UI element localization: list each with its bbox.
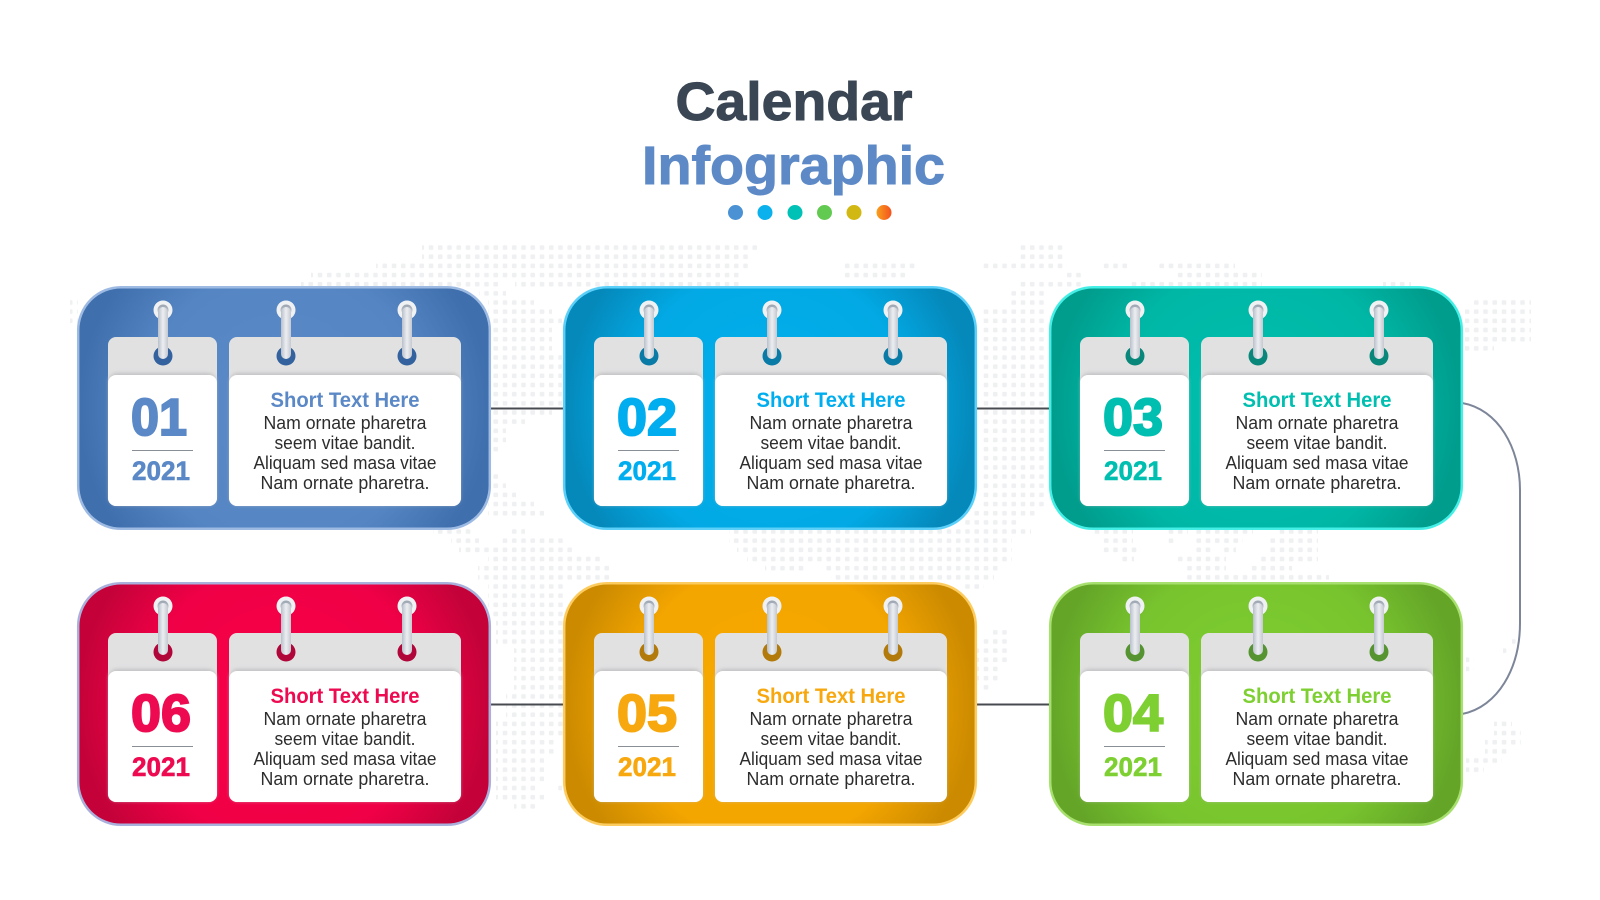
date <box>1103 389 1165 486</box>
text block: Nam ornate pharetra. <box>1232 473 1402 493</box>
text block: Aliquam sed masa vitae <box>254 749 436 769</box>
text block <box>1226 389 1408 493</box>
text block: Nam ornate pharetra <box>264 709 427 729</box>
text block: seem vitae bandit. <box>760 729 902 749</box>
date: 05 <box>617 685 677 743</box>
rings <box>640 596 902 662</box>
date: 03 <box>1103 389 1163 447</box>
title line: Infographic: Infographic <box>642 136 945 196</box>
connector: card 5 to card 6 <box>491 704 564 706</box>
date: 2021 <box>1104 456 1162 486</box>
text block: Aliquam sed masa vitae <box>740 453 922 473</box>
panel: card 05 <box>564 583 976 825</box>
date <box>1103 685 1165 782</box>
text block <box>254 389 436 493</box>
text block: Short Text Here <box>756 685 906 708</box>
date: 06 <box>131 685 191 743</box>
title <box>642 72 945 196</box>
connector: curved link card 3 to card 4 <box>1462 403 1520 714</box>
background: dotted world map <box>70 246 1531 808</box>
text block: Short Text Here <box>1242 685 1392 708</box>
text block: Nam ornate pharetra <box>750 413 913 433</box>
text block: Nam ornate pharetra. <box>1232 769 1402 789</box>
text block: Short Text Here <box>270 685 420 708</box>
rings <box>1126 300 1388 366</box>
text block: Short Text Here <box>756 389 906 412</box>
date <box>617 389 679 486</box>
coloured dots under title <box>728 205 892 220</box>
text block: seem vitae bandit. <box>274 729 416 749</box>
date: 2021 <box>618 456 676 486</box>
text block: seem vitae bandit. <box>274 433 416 453</box>
text block: seem vitae bandit. <box>1246 433 1388 453</box>
title line: Calendar: Calendar <box>676 72 912 132</box>
panel: card 03 <box>1050 287 1462 529</box>
date <box>131 389 193 486</box>
text block: seem vitae bandit. <box>760 433 902 453</box>
text block: seem vitae bandit. <box>1246 729 1388 749</box>
date: 2021 <box>618 752 676 782</box>
panel: card 02 <box>564 287 976 529</box>
text block: Nam ornate pharetra. <box>260 473 430 493</box>
text block: Nam ornate pharetra <box>1236 413 1399 433</box>
rings <box>154 596 416 662</box>
text block: Aliquam sed masa vitae <box>740 749 922 769</box>
text block: Nam ornate pharetra. <box>260 769 430 789</box>
date <box>131 685 193 782</box>
text block: Nam ornate pharetra. <box>746 769 916 789</box>
panel: card 06 <box>78 583 490 825</box>
text block: Aliquam sed masa vitae <box>1226 453 1408 473</box>
text block: Aliquam sed masa vitae <box>254 453 436 473</box>
connector: card 2 to card 3 <box>977 408 1050 410</box>
connector: card 4 to card 5 <box>977 704 1050 706</box>
date: 01 <box>131 389 187 447</box>
text block: Short Text Here <box>270 389 420 412</box>
date <box>617 685 679 782</box>
text block: Short Text Here <box>1242 389 1392 412</box>
text block: Nam ornate pharetra <box>1236 709 1399 729</box>
rings <box>154 300 416 366</box>
text block: Aliquam sed masa vitae <box>1226 749 1408 769</box>
date: 2021 <box>132 456 190 486</box>
text block: Nam ornate pharetra <box>264 413 427 433</box>
date: 04 <box>1103 685 1163 743</box>
text block <box>1226 685 1408 789</box>
date: 2021 <box>132 752 190 782</box>
date: 2021 <box>1104 752 1162 782</box>
connector: card 1 to card 2 <box>491 408 564 410</box>
text block: Nam ornate pharetra <box>750 709 913 729</box>
text block <box>254 685 436 789</box>
panel: card 04 <box>1050 583 1462 825</box>
text block <box>740 685 922 789</box>
panel: card 01 <box>78 287 490 529</box>
rings <box>640 300 902 366</box>
rings <box>1126 596 1388 662</box>
date: 02 <box>617 389 677 447</box>
text block <box>740 389 922 493</box>
text block: Nam ornate pharetra. <box>746 473 916 493</box>
